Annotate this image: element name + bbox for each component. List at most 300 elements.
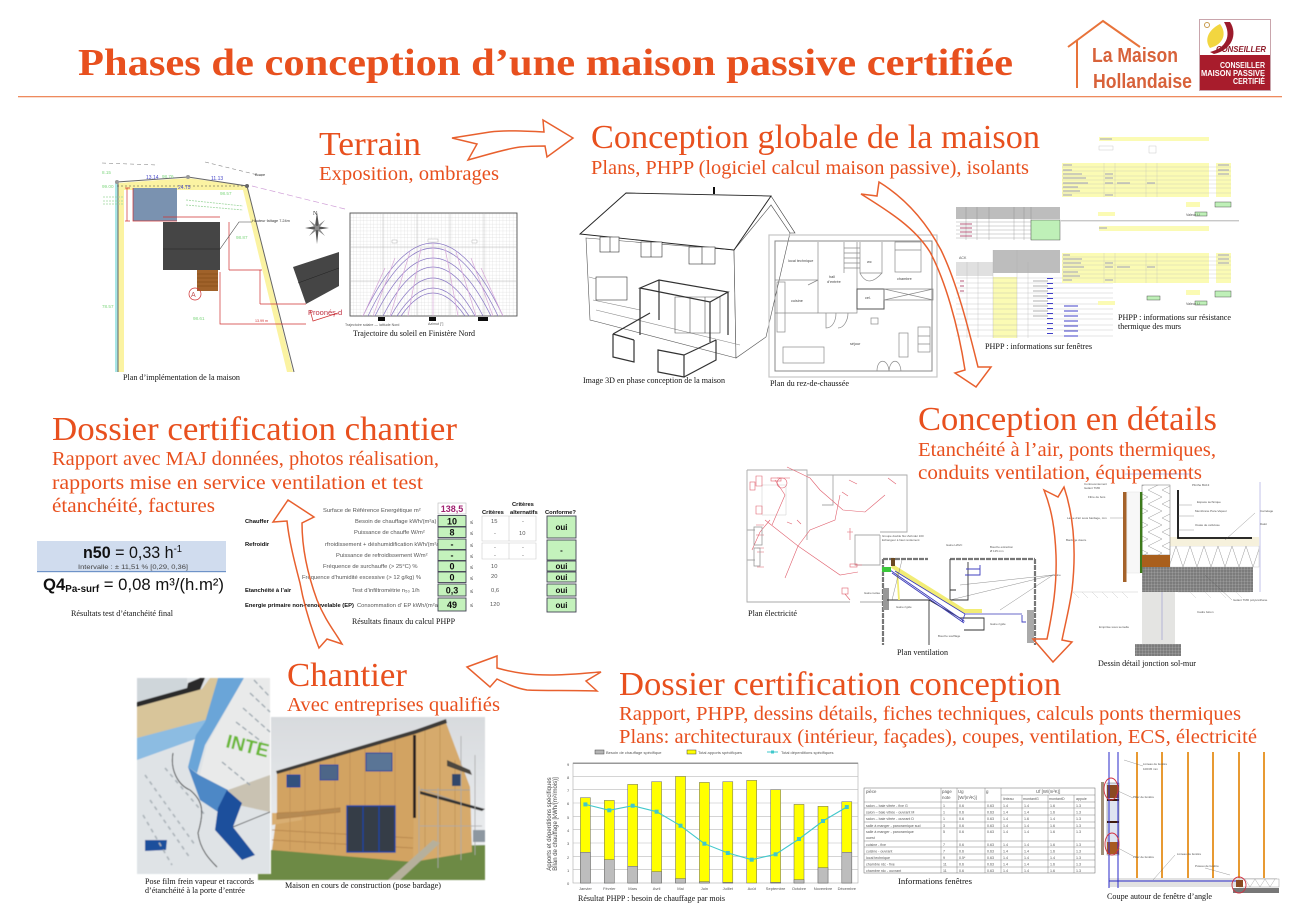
panel: terrain heading: Exposition, ombrages	[319, 164, 499, 185]
detail drawing: floor-wall junction: Ouate de cellulose	[1195, 523, 1220, 527]
caption: plan implementation: Plan d’implémentation de la maison	[123, 372, 241, 382]
arrow: dossier conception to chantier	[467, 656, 601, 691]
PHPP final results table: -	[560, 546, 563, 555]
table: window information: 0.6	[959, 810, 964, 814]
chart: monthly heating need: Décembre	[838, 886, 857, 891]
ventilation plan: Gaine isolée	[864, 591, 880, 595]
table: window information: chambre rdc - fixe	[866, 862, 895, 866]
panel: conception en details heading	[918, 401, 1217, 484]
PHPP final results table: ≤	[470, 589, 473, 595]
table: window information: 1.4	[1050, 817, 1055, 821]
PHPP final results table: Besoin de chauffage kWh/(m²a)	[355, 519, 436, 525]
PHPP final results table: Chauffer	[245, 519, 270, 525]
table: window information: 1.6	[1050, 824, 1055, 828]
table: window information	[864, 788, 1095, 873]
table: window information: 1.4	[1003, 824, 1008, 828]
PHPP final results table: ≤	[470, 520, 473, 526]
arrow: conception to details	[861, 182, 991, 387]
caption: informations fenetres: Informations fenêtres	[898, 876, 972, 886]
PHPP final results table: 10	[447, 516, 457, 526]
panel: dossier certification conception heading: Plans: architecturaux (intérieur, façades), coupes, ventilation, ECS, électricité	[619, 727, 1257, 748]
PHPP final results table: -	[494, 545, 496, 551]
section drawing: corner window: Poteau de fenêtre	[1195, 864, 1219, 868]
logo: La Maison Hollandaise: Hollandaise	[1093, 71, 1192, 93]
table: window information: 1.4	[1024, 862, 1029, 866]
site plan: 98.61	[193, 316, 205, 321]
chart legend: Total déperditions spécifiques	[781, 750, 833, 755]
table: window information: 1.4	[1024, 856, 1029, 860]
chart legend: Besoin de chauffage spécifique	[606, 750, 662, 755]
table: window information: 1.3	[1076, 843, 1081, 847]
PHPP final results table: 10	[491, 564, 497, 570]
table: window information: 1.6	[1050, 869, 1055, 873]
section drawing: corner window: 100/45 mm	[1143, 767, 1159, 771]
logo: conseiller maison passive certifié: CONSEILLER	[1216, 44, 1266, 54]
table: window information: 1.3	[1076, 817, 1081, 821]
panel: terrain heading: Terrain	[319, 126, 421, 163]
PHPP final results table: 138,5	[441, 504, 463, 514]
table: window information: page	[942, 789, 952, 794]
table: window information: 1.4	[1024, 869, 1029, 873]
floor plan: chambre	[897, 277, 912, 281]
panel: chantier heading: Avec entreprises qualifiés	[287, 695, 500, 716]
table: window information: montantG	[1023, 797, 1039, 801]
PHPP final results table: oui	[556, 523, 568, 532]
detail drawing: floor-wall junction: Lame d’air sous bardage, mm	[1067, 516, 1107, 520]
table: window information: chambre rdc - ouvrant	[866, 869, 901, 873]
section drawing: corner window: Linteau de fenêtre	[1177, 852, 1202, 856]
panel: dossier certification chantier heading	[52, 411, 458, 517]
PHPP final results table: Etanchéité à l’air	[245, 588, 292, 594]
PHPP final results table: Consommation d’ EP kWh/(m²a)	[357, 603, 440, 609]
table: window information: 1.4	[1050, 856, 1055, 860]
table: window information: 1.4	[1003, 850, 1008, 854]
chart: monthly heating need: Mai	[677, 886, 684, 891]
PHPP final results table: ≤	[470, 603, 473, 609]
detail drawing: floor-wall junction: Cadre béton	[1197, 610, 1214, 614]
detail drawing: floor-wall junction: Contreventement	[1084, 482, 1107, 486]
electricity plan	[747, 467, 907, 602]
panel: conception globale heading	[591, 119, 1040, 179]
detail drawing: floor-wall junction: Carrelage	[1260, 509, 1274, 513]
caption: plan rez-de-chaussee: Plan du rez-de-chaussée	[770, 378, 849, 388]
table: window information: 1.3	[1076, 862, 1081, 866]
panel: dossier certification chantier heading: étanchéité, factures	[52, 496, 215, 517]
table: window information: ouest	[866, 836, 875, 840]
chart: monthly heating need: Septembre	[766, 886, 786, 891]
panel: terrain heading	[319, 126, 499, 185]
ventilation plan: Bouche soufflage	[938, 634, 961, 638]
PHPP windows table	[956, 207, 1113, 338]
PHPP final results table: 0,6	[491, 588, 499, 594]
ventilation plan: Gaine	[1053, 573, 1061, 577]
chart: monthly heating need: Août	[748, 886, 757, 891]
table: window information: 1.4	[1003, 843, 1008, 847]
table: window information: 1.6	[1050, 862, 1055, 866]
table: window information: 0.6	[959, 804, 964, 808]
ventilation plan: Bouche extraction	[990, 545, 1014, 549]
site plan: 99.00	[102, 184, 114, 189]
photo: house under construction	[258, 717, 485, 880]
table: window information: 0.63	[987, 869, 994, 873]
floor plan: cel.	[865, 296, 871, 300]
table: window information: 9	[943, 856, 945, 860]
table: window information: 1.4	[1024, 830, 1029, 834]
PHPP final results table: Conforme?	[545, 510, 576, 516]
ventilation plan	[864, 534, 1061, 645]
caption: image 3D: Image 3D en phase conception de la maison	[583, 375, 726, 385]
PHPP final results table: ≤	[470, 531, 473, 537]
table: window information: 0.63	[987, 856, 994, 860]
section drawing: corner window	[1101, 752, 1279, 893]
PHPP final results table: 0,3	[446, 586, 458, 596]
caption: resultats PHPP: Résultats finaux du calcul PHPP	[352, 616, 455, 626]
detail drawing: floor-wall junction: Espace technique	[1197, 500, 1221, 504]
PHPP windows table: ACK	[959, 256, 967, 260]
section drawing: corner window: Pilier de fenêtre	[1133, 795, 1154, 799]
caption: trajectoire: Trajectoire du soleil en Finistère Nord	[353, 328, 476, 338]
table: window information: Uf [W/(m²K)]	[1036, 789, 1060, 794]
PHPP final results table: -	[522, 519, 524, 525]
panel: dossier certification conception heading: Rapport, PHPP, dessins détails, fiches techniques, calculs ponts thermiques	[619, 704, 1241, 725]
PHPP final results table: -	[522, 545, 524, 551]
table: window information: salon – baie vitrée - fixe G	[866, 804, 908, 808]
PHPP final results table: Surface de Référence Energétique m²	[323, 508, 421, 514]
table: window information: 0.6	[959, 850, 964, 854]
chart: monthly heating need: Janvier	[579, 886, 593, 891]
header rule	[18, 96, 1282, 97]
table: window information: 1.6	[1050, 843, 1055, 847]
panel: dossier certification chantier heading: Rapport avec MAJ données, photos réalisation,	[52, 449, 439, 470]
table: window information: Ug	[958, 789, 964, 794]
caption: coupe fenetre: Coupe autour de fenêtre d’angle	[1107, 891, 1212, 901]
site plan: 24.75	[178, 185, 191, 191]
caption: resultat PHPP: Résultat PHPP : besoin de chauffage par mois	[578, 893, 725, 903]
icon: compass rose	[305, 211, 329, 244]
site plan	[102, 162, 345, 372]
site plan: 13.99 m	[255, 319, 268, 323]
table: window information: 0.6	[959, 817, 964, 821]
caption: plan ventilation: Plan ventilation	[897, 647, 949, 657]
chart: monthly heating need: Juin	[701, 886, 708, 891]
table: window information: 0.63	[987, 824, 994, 828]
table: window information: 1.3	[1076, 856, 1081, 860]
site plan: Proonéş.d	[308, 308, 342, 317]
title: Phases de conception d’une maison passive certifiée	[78, 42, 1013, 84]
site plan: A	[191, 292, 196, 299]
PHPP final results table: 120	[490, 602, 500, 608]
panel: conception en details heading: conduits ventilation, équipements	[918, 463, 1202, 484]
chart: monthly heating need: Juillet	[723, 886, 734, 891]
chart legend	[595, 750, 833, 755]
logo: La Maison Hollandaise	[1068, 21, 1192, 93]
chart: monthly heating need: Mars	[628, 886, 637, 891]
detail drawing: floor-wall junction: Dalot	[1260, 522, 1267, 526]
table: window information: 0.6	[959, 824, 964, 828]
PHPP final results table: -	[450, 550, 454, 560]
detail drawing: floor-wall junction	[1066, 474, 1274, 656]
table: window information: 1.3	[1076, 824, 1081, 828]
airtightness results box	[37, 541, 226, 595]
detail drawing: floor-wall junction: Empirise sous semelle	[1099, 625, 1129, 629]
table: window information: 1.3	[1076, 850, 1081, 854]
airtightness results box: -1	[174, 544, 182, 555]
table: window information: 0.63	[987, 810, 994, 814]
PHPP final results table: -	[450, 540, 454, 550]
PHPP final results table: -	[522, 553, 524, 559]
PHPP final results table: Critères	[512, 502, 534, 508]
chart legend: Total apports spécifiques	[698, 750, 742, 755]
icon: compass rose: N	[313, 211, 318, 217]
PHPP final results table: 0	[449, 572, 455, 582]
floor plan: séjour	[850, 342, 861, 346]
floor plan: local technique	[788, 259, 813, 263]
table: window information: [W/(m²K)]	[958, 795, 977, 800]
panel: dossier certification conception heading	[619, 666, 1257, 748]
site plan: 8.15	[102, 170, 111, 175]
PHPP final results table: -	[494, 531, 496, 537]
table: window information: 0.6	[959, 843, 964, 847]
PHPP final results table: 0	[449, 562, 455, 572]
panel: dossier certification chantier heading: Dossier certification chantier	[52, 411, 458, 448]
PHPP final results table: 20	[491, 574, 497, 580]
table: window information: 1.4	[1024, 804, 1029, 808]
airtightness results box: Pa-surf	[65, 584, 100, 595]
site plan: 11.13	[211, 176, 223, 182]
table: window information: 1.4	[1024, 824, 1029, 828]
ventilation plan: Ø 125 mm	[990, 549, 1004, 553]
table: window information: 3	[943, 824, 945, 828]
table: window information: 11	[943, 862, 947, 866]
arrow: terrain to conception	[452, 120, 573, 160]
table: window information: 1.4	[1003, 810, 1008, 814]
PHPP final results table	[245, 502, 576, 612]
site plan: 98.76	[162, 174, 174, 179]
table: window information: cuisine - fixe	[866, 843, 886, 847]
chart: monthly heating need: 6	[567, 801, 570, 806]
panel: conception en details heading: Etanchéité à l’air, ponts thermiques,	[918, 440, 1216, 461]
chart: sun path: Trajectoire solaire — latitude Nord	[345, 323, 399, 327]
caption: maison construction: Maison en cours de construction (pose bardage)	[285, 880, 441, 890]
table: window information: 1.4	[1003, 817, 1008, 821]
PHPP final results table: 15	[491, 519, 497, 525]
table: window information: 1.6	[1050, 850, 1055, 854]
PHPP walls sheet	[1061, 137, 1239, 306]
table: window information: 7	[943, 850, 945, 854]
panel: chantier heading: Chantier	[287, 657, 408, 694]
floor plan	[769, 235, 937, 377]
photo: vapour barrier film: INTE	[224, 731, 271, 762]
chart: monthly heating need: 5	[567, 815, 570, 820]
table: window information: 1.3	[1076, 810, 1081, 814]
PHPP final results table: Puissance de refroidissement W/m²	[336, 553, 428, 559]
logo: conseiller maison passive certifié: CONSEILLER	[1220, 61, 1265, 70]
floor plan: hall	[829, 275, 835, 279]
detail drawing: floor-wall junction: Fibre de bois	[1088, 495, 1106, 499]
table: window information: 0.5*	[959, 856, 966, 860]
PHPP final results table: alternatifs	[510, 510, 538, 516]
table: window information: 1.3	[1076, 804, 1081, 808]
chart: monthly heating need: Avril	[653, 886, 661, 891]
PHPP walls sheet: Valeur U	[1186, 302, 1200, 306]
section drawing: corner window: Pilier de fenêtre	[1133, 855, 1154, 859]
chart: sun path: Azimut [°]	[428, 322, 443, 326]
panel: dossier certification chantier heading: rapports mise en service ventilation et test	[52, 473, 424, 494]
table: window information: 0.63	[987, 843, 994, 847]
detail drawing: floor-wall junction: Bardage douze	[1066, 538, 1087, 542]
PHPP final results table: ≤	[470, 576, 473, 582]
caption: PHPP murs: thermique des murs	[1118, 321, 1181, 331]
table: window information: 11	[943, 869, 947, 873]
section drawing: corner window: Linteau de fenêtre	[1143, 762, 1168, 766]
PHPP final results table: ≤	[470, 554, 473, 560]
table: window information: 0.6	[959, 862, 964, 866]
panel: conception globale heading: Conception globale de la maison	[591, 119, 1040, 156]
site plan: 13.14	[146, 175, 159, 181]
PHPP final results table: ≤	[470, 543, 473, 549]
panel: dossier certification conception heading: Dossier certification conception	[619, 666, 1061, 703]
chart: monthly heating need	[547, 750, 858, 891]
chart: sun path	[345, 213, 517, 327]
table: window information: 1.4	[1003, 862, 1008, 866]
table: window information: 1.3	[1076, 869, 1081, 873]
table: window information: 1.4	[1003, 830, 1008, 834]
table: window information: 1	[943, 810, 945, 814]
PHPP final results table: oui	[556, 601, 568, 610]
detail drawing: floor-wall junction: Plinthe BA13	[1192, 483, 1210, 487]
caption: PHPP fenetres: PHPP : informations sur fenêtres	[985, 341, 1092, 351]
airtightness results box: = 0,08 m³/(h.m²)	[99, 575, 224, 594]
logo: La Maison Hollandaise: La Maison	[1092, 45, 1178, 67]
table: window information: 1.4	[1024, 843, 1029, 847]
panel: chantier heading	[287, 657, 500, 716]
table: window information: 1.4	[1003, 804, 1008, 808]
logo: conseiller maison passive certifié	[1200, 20, 1270, 90]
table: window information: salle à manger - panoramique sud	[866, 824, 921, 828]
detail drawing: floor-wall junction: Isolant TMD	[1084, 486, 1101, 490]
table: window information: 0.63	[987, 817, 994, 821]
PHPP final results table: Fréquence de surchauffe (> 25°C) %	[323, 564, 418, 570]
table: window information: 0.63	[987, 862, 994, 866]
table: window information: 0.6	[959, 830, 964, 834]
logo: conseiller maison passive certifié: CERTIFIÉ	[1233, 77, 1266, 86]
arrow: details to dossier conception	[1033, 487, 1074, 662]
airtightness results box: Intervalle : ± 11,51 % [0,29, 0,36]	[78, 565, 188, 571]
chart: monthly heating need: Novembre	[814, 886, 833, 891]
site plan: Hauteur faîtage 7.24m	[252, 219, 290, 223]
table: window information: 1.4	[1024, 850, 1029, 854]
ventilation plan: Gaine HAVC	[946, 543, 962, 547]
3D house drawing	[580, 187, 795, 377]
panel: conception en details heading: Conception en détails	[918, 401, 1217, 438]
table: window information: 1.4	[1003, 856, 1008, 860]
PHPP final results table: 49	[447, 600, 457, 610]
PHPP final results table: ≤	[470, 565, 473, 571]
chart: monthly heating need: 3	[567, 841, 570, 846]
PHPP final results table: rfroidissement + déshumidification kWh/(m²a)	[325, 542, 442, 548]
PHPP final results table: Energie primaire non-renouvelable (EP)	[245, 603, 354, 609]
table: window information: pièce	[866, 789, 877, 794]
site plan: 98.87	[236, 235, 248, 240]
PHPP final results table: Fréquence d’humidité excessive (> 12 g/kg) %	[302, 575, 421, 581]
table: window information: 1.6	[1050, 830, 1055, 834]
floor plan: wc	[867, 260, 872, 264]
caption: test etancheite: Résultats test d’étanchéité final	[71, 608, 174, 618]
chart: monthly heating need: Février	[603, 886, 616, 891]
PHPP final results table: oui	[556, 573, 568, 582]
table: window information: 1.4	[1003, 869, 1008, 873]
caption: pose film: Pose film frein vapeur et raccords	[145, 876, 254, 886]
PHPP final results table: oui	[556, 586, 568, 595]
table: window information: cuisine - ouvrant	[866, 850, 892, 854]
site plan: Borne	[255, 173, 265, 177]
PHPP final results table: -	[494, 553, 496, 559]
PHPP final results table: Puissance de chauffe W/m²	[354, 530, 425, 536]
PHPP final results table: 10	[519, 531, 525, 537]
ventilation plan: Gaine rigide	[990, 622, 1006, 626]
photo: vapour barrier film	[137, 678, 271, 874]
PHPP final results table: Critères	[482, 510, 504, 516]
PHPP final results table: Refroidir	[245, 542, 270, 548]
table: window information: 1	[943, 817, 945, 821]
caption: detail jonction: Dessin détail jonction sol-mur	[1098, 658, 1196, 668]
table: window information: 5	[943, 830, 945, 834]
site plan: 98.57	[220, 191, 232, 196]
site plan: 78.57	[102, 304, 114, 309]
PHPP final results table: Test d’infiltrométrie n₅₀ 1/h	[352, 588, 420, 594]
floor plan: cuisine	[791, 299, 803, 303]
caption: PHPP murs	[1118, 312, 1231, 331]
airtightness results box: Q4	[43, 575, 66, 594]
chart: monthly heating need: Octobre	[792, 886, 807, 891]
chart: monthly heating need: 7	[567, 788, 570, 793]
table: window information: 0.63	[987, 850, 994, 854]
table: window information: appuie	[1076, 797, 1087, 801]
table: window information: 1	[943, 804, 945, 808]
table: window information: linteau	[1003, 797, 1014, 801]
table: window information: 0.63	[987, 804, 994, 808]
detail drawing: floor-wall junction: Membrane Pare-Vapeur	[1195, 509, 1227, 513]
chart: monthly heating need: Apports et déperditions spécifiques	[547, 777, 553, 871]
table: window information: 0.6	[959, 869, 964, 873]
table: window information: 7	[943, 843, 945, 847]
chart: monthly heating need: Bilan de chauffage [kWh/(m²/mois)]	[553, 777, 559, 871]
PHPP final results table: 8	[449, 528, 455, 538]
table: window information: 0.63	[987, 830, 994, 834]
chart: monthly heating need: 0	[567, 881, 570, 886]
chart: monthly heating need: 1	[567, 868, 570, 873]
ventilation plan: Echangeur à haut rendement	[882, 538, 920, 542]
chart: monthly heating need: 4	[567, 828, 570, 833]
airtightness results box: n50 = 0,33 h	[83, 543, 177, 562]
caption: plan electricite: Plan électricité	[748, 608, 797, 618]
PHPP final results table: oui	[556, 562, 568, 571]
table: window information: salon – baie vitrée - ouvrant D	[866, 817, 914, 821]
arrow: chantier to dossier chantier	[273, 500, 342, 648]
PHPP walls sheet: Valeur U	[1186, 213, 1200, 217]
table: window information: 1.6	[1024, 817, 1029, 821]
table: window information: montantD	[1049, 797, 1065, 801]
caption: PHPP murs: PHPP : informations sur résistance	[1118, 312, 1231, 322]
detail drawing: floor-wall junction: Isolant TMD polyuréthane	[1233, 598, 1268, 602]
table: window information: 1.3	[1076, 830, 1081, 834]
table: window information: g	[986, 789, 989, 794]
table: window information: 1.6	[1050, 810, 1055, 814]
chart: monthly heating need: 8	[567, 775, 570, 780]
table: window information: local technique	[866, 856, 890, 860]
logo: conseiller maison passive certifié: MAISON PASSIVE	[1201, 69, 1266, 78]
ventilation plan: Gaine rigide	[896, 605, 912, 609]
